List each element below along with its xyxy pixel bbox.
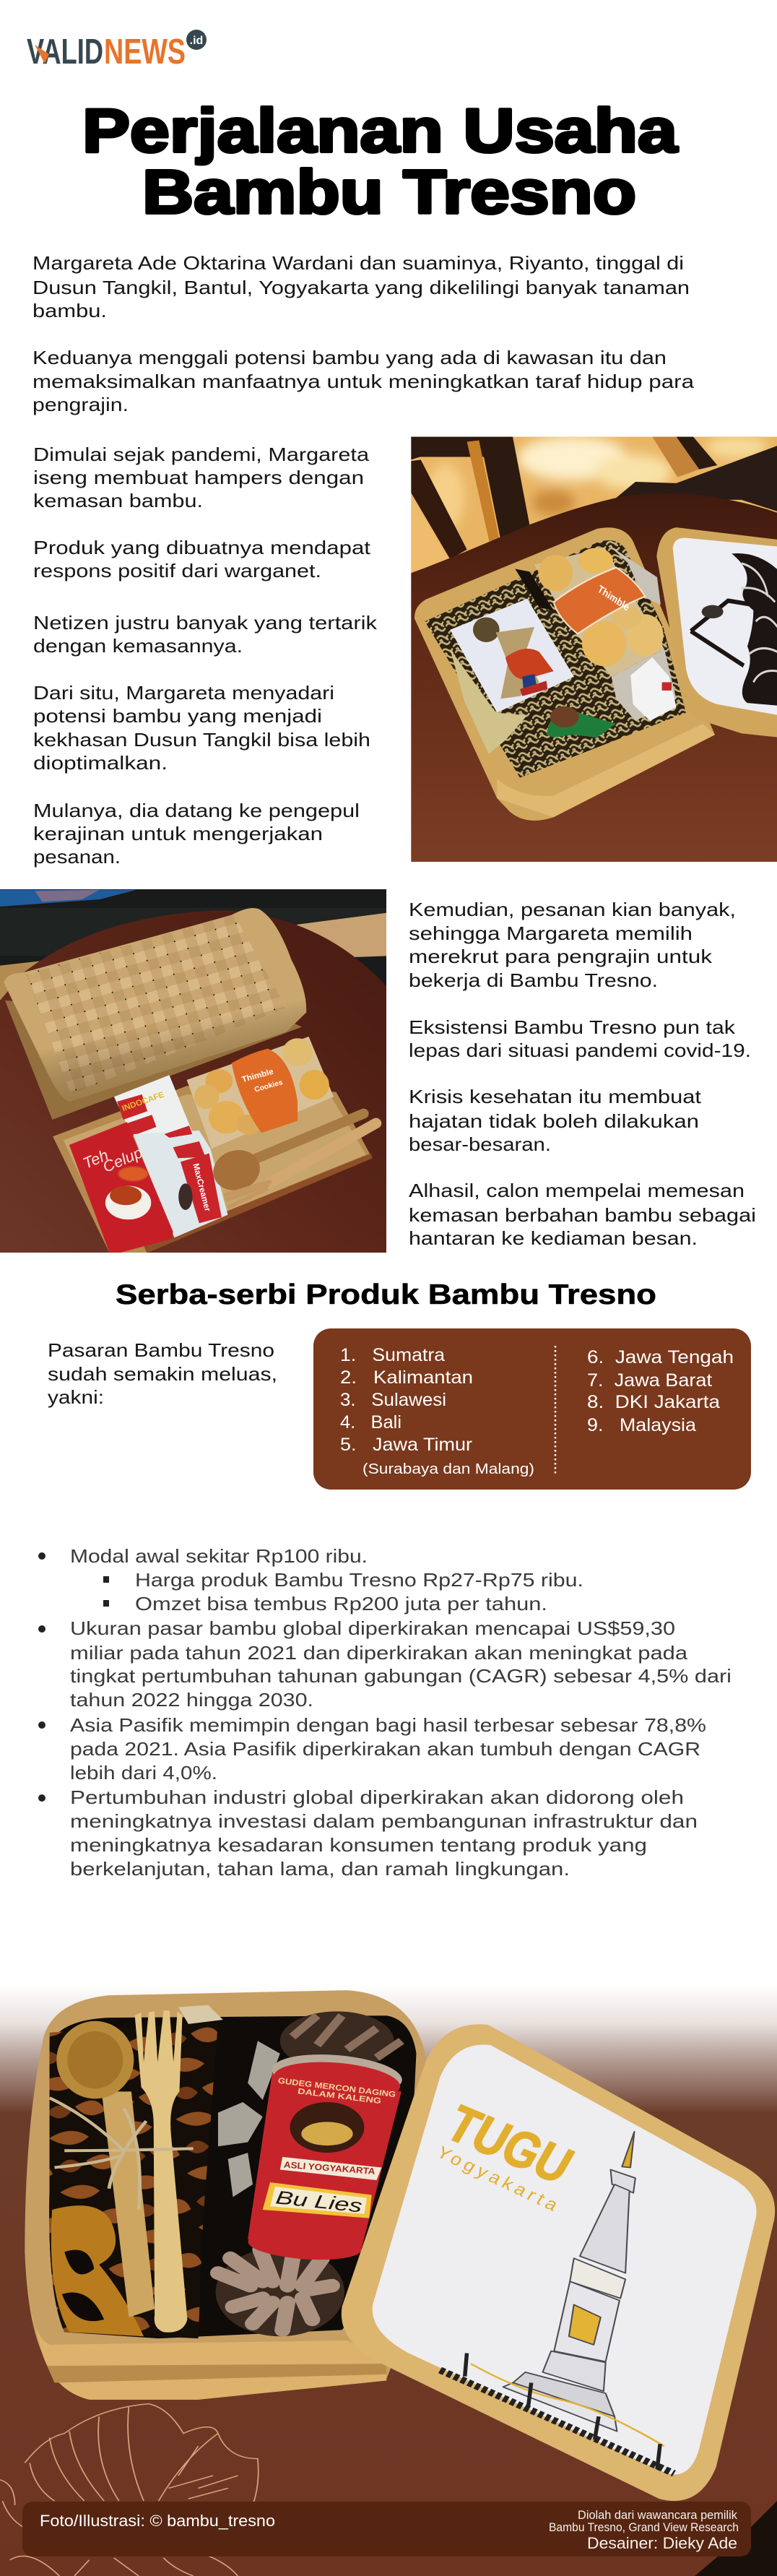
title: Bambu Tresno	[142, 158, 636, 227]
text: pasaran: yakni:	[48, 1386, 104, 1408]
logo: TUGU Yogyakarta	[440, 2104, 576, 2212]
text: pasaran: Pasaran Bambu Tresno	[48, 1339, 274, 1361]
photo: bamboo box with Tugu Yogyakarta lid	[0, 1990, 777, 2576]
bullet list: Harga produk Bambu Tresno Rp27-Rp75 ribu.	[135, 1569, 583, 1591]
lid with wayang	[656, 527, 777, 738]
bullet list: Omzet bisa tembus Rp200 juta per tahun.	[135, 1593, 547, 1615]
bullet list: Asia Pasifik memimpin dengan bagi hasil terbesar sebesar 78,8%	[70, 1714, 706, 1736]
text block: pesanan kian banyak: besar-besaran.	[409, 1133, 551, 1155]
bullet list	[38, 1545, 732, 1880]
bullet list: Modal awal sekitar Rp100 ribu.	[70, 1545, 368, 1567]
logo: Validnews.id: NEWS	[104, 33, 186, 72]
list: kolom kanan: 6. Jawa Tengah	[587, 1347, 734, 1367]
text block: awal usaha: Produk yang dibuatnya mendapat	[33, 537, 371, 558]
bullet list: pada 2021. Asia Pasifik diperkirakan akan tumbuh dengan CAGR	[70, 1738, 700, 1760]
sachets	[114, 1075, 227, 1237]
text block: pesanan kian banyak: sehingga Margareta memilih	[409, 922, 693, 944]
box: Thimble	[596, 583, 632, 613]
text block: pesanan kian banyak: Eksistensi Bambu Tresno pun tak	[409, 1016, 736, 1038]
tray	[53, 1086, 372, 1253]
list: kolom kiri: 4. Bali	[340, 1412, 401, 1432]
bullet list: tahun 2022 hingga 2030.	[70, 1689, 313, 1711]
logo: TUGU Yogyakarta: Yogyakarta	[433, 2143, 562, 2215]
text block: awal usaha: potensi bambu yang menjadi	[33, 705, 322, 727]
bullet list: meningkatnya investasi dalam pembangunan infrastruktur dan	[70, 1810, 698, 1832]
section heading: Serba-serbi Produk Bambu Tresno	[116, 1279, 656, 1310]
intro text: Dusun Tangkil, Bantul, Yogyakarta yang dikelilingi banyak tanaman	[32, 277, 690, 298]
intro text: Margareta Ade Oktarina Wardani dan suaminya, Riyanto, tinggal di	[32, 252, 684, 274]
list: kolom kiri: (Surabaya dan Malang)	[363, 1461, 534, 1477]
title: Perjalanan Usaha	[82, 97, 678, 165]
source and designer credit	[549, 2508, 739, 2552]
bullet list: Ukuran pasar bambu global diperkirakan mencapai US$59,30	[70, 1617, 675, 1639]
source and designer credit: Desainer: Dieky Ade	[587, 2534, 737, 2552]
list: kolom kiri: 1. Sumatra	[340, 1345, 445, 1365]
list: kolom kanan	[587, 1347, 734, 1435]
pinecone bottom	[216, 2248, 344, 2336]
text block: pesanan kian banyak: Krisis kesehatan itu membuat	[409, 1086, 702, 1107]
cookies: Thimble	[241, 1068, 275, 1084]
fork	[135, 2010, 187, 2333]
text block: awal usaha: Dimulai sejak pandemi, Margareta	[33, 444, 370, 465]
text block: pesanan kian banyak: merekrut para pengrajin untuk	[409, 946, 713, 967]
cookies: Cookies	[253, 1079, 284, 1094]
gudeg can: GUDEG MERCON DAGING	[277, 2076, 396, 2099]
text block: awal usaha: respons positif dari warganet.	[33, 560, 321, 582]
text block: awal usaha: kemasan bambu.	[33, 490, 203, 511]
text block: pesanan kian banyak: kemasan berbahan bambu sebagai	[409, 1204, 756, 1226]
woven lid	[4, 908, 306, 1120]
panel: daftar wilayah pasaran	[313, 1328, 751, 1490]
list: kolom kiri: 2. Kalimantan	[340, 1367, 473, 1388]
text block: pesanan kian banyak: Alhasil, calon mempelai memesan	[409, 1180, 745, 1201]
text block: awal usaha: iseng membuat hampers dengan	[33, 467, 364, 488]
intro text	[32, 252, 695, 415]
text block: awal usaha: dengan kemasannya.	[33, 635, 243, 657]
text: pasaran	[48, 1339, 277, 1408]
bullet list: Pertumbuhan industri global diperkirakan akan didorong oleh	[70, 1786, 684, 1808]
list: kolom kanan: 9. Malaysia	[587, 1415, 696, 1435]
text block: pesanan kian banyak: hajatan tidak boleh dilakukan	[409, 1110, 699, 1132]
box	[414, 527, 715, 821]
bullet list: berkelanjutan, tahan lama, dan ramah lingkungan.	[70, 1858, 570, 1880]
sachets: MaxCreamer	[191, 1162, 212, 1213]
table	[411, 493, 777, 863]
text block: awal usaha: pesanan.	[33, 846, 121, 868]
sachets: INDOCAFE	[121, 1091, 165, 1113]
spoon and fork	[207, 1114, 376, 1208]
list: kolom kiri	[340, 1345, 534, 1477]
intro text: Keduanya menggali potensi bambu yang ada di kawasan itu dan	[32, 347, 667, 368]
decorative leaf outline	[0, 2404, 259, 2576]
bullet list: miliar pada tahun 2021 dan diperkirakan akan meningkat pada	[70, 1642, 688, 1664]
text block: pesanan kian banyak: lepas dari situasi pandemi covid-19.	[409, 1040, 751, 1061]
text block: pesanan kian banyak: Kemudian, pesanan kian banyak,	[409, 899, 736, 920]
intro text: memaksimalkan manfaatnya untuk meningkatkan taraf hidup para	[32, 371, 695, 392]
title	[82, 97, 678, 227]
spoon	[56, 2021, 155, 2317]
tea box: Celup	[100, 1144, 145, 1176]
text block: awal usaha: kekhasan Dusun Tangkil bisa lebih	[33, 729, 370, 751]
monument	[503, 2132, 635, 2432]
list: kolom kiri: 3. Sulawesi	[340, 1390, 446, 1410]
list: kolom kanan: 7. Jawa Barat	[587, 1370, 712, 1391]
bullet list: tingkat pertumbuhan tahunan gabungan (CAGR) sebesar 4,5% dari	[70, 1665, 732, 1687]
source and designer credit: Bambu Tresno, Grand View Research	[549, 2520, 739, 2534]
gudeg can: ASLI YOGYAKARTA	[283, 2160, 376, 2177]
bamboo box	[25, 1990, 425, 2400]
gudeg can: Bu Lies	[274, 2187, 363, 2216]
cookies	[187, 1037, 334, 1149]
text block: awal usaha	[33, 444, 378, 868]
footer bar: credits	[22, 2502, 751, 2556]
text block: pesanan kian banyak: bekerja di Bambu Tresno.	[409, 969, 658, 991]
list: kolom kanan: 8. DKI Jakarta	[587, 1392, 720, 1412]
twine	[50, 2098, 194, 2210]
intro text: bambu.	[32, 300, 107, 321]
bullet list: meningkatnya kesadaran konsumen tentang produk yang	[70, 1834, 647, 1856]
text: pasaran: sudah semakin meluas,	[48, 1363, 277, 1385]
text block: awal usaha: Mulanya, dia datang ke pengepul	[33, 800, 360, 821]
text block: awal usaha: kerajinan untuk mengerjakan	[33, 823, 323, 844]
gudeg can	[247, 2049, 404, 2263]
text block: pesanan kian banyak: hantaran ke kediaman besan.	[409, 1227, 698, 1249]
bullet list: lebih dari 4,0%.	[70, 1762, 217, 1784]
crumpled paper	[178, 2005, 280, 2197]
text block: awal usaha: Netizen justru banyak yang tertarik	[33, 612, 378, 634]
logo: Validnews.id: VALID	[27, 33, 103, 72]
photo credit: Foto/Illustrasi: © bambu_tresno	[40, 2512, 275, 2530]
gudeg can: DALAM KALENG	[297, 2086, 382, 2106]
tea box: Teh	[80, 1146, 111, 1172]
intro text: pengrajin.	[32, 394, 129, 415]
logo: TUGU Yogyakarta: TUGU	[437, 2096, 583, 2195]
photo: woven bamboo box with tray	[0, 889, 388, 1253]
text block: awal usaha: dioptimalkan.	[33, 752, 168, 774]
logo: Validnews.id: .id	[190, 35, 203, 47]
list: kolom kiri: 5. Jawa Timur	[340, 1435, 472, 1455]
pinecone top	[280, 2011, 404, 2062]
text block: awal usaha: Dari situ, Margareta menyadari	[33, 682, 334, 704]
table	[0, 910, 388, 1253]
lid with Tugu monument	[342, 2024, 775, 2501]
text block: pesanan kian banyak	[409, 899, 756, 1249]
photo: bamboo hamper with wayang lid	[411, 436, 777, 863]
tea box	[69, 1122, 173, 1253]
logo: Validnews.id	[27, 30, 207, 72]
source and designer credit: Diolah dari wawancara pemilik	[578, 2508, 737, 2522]
